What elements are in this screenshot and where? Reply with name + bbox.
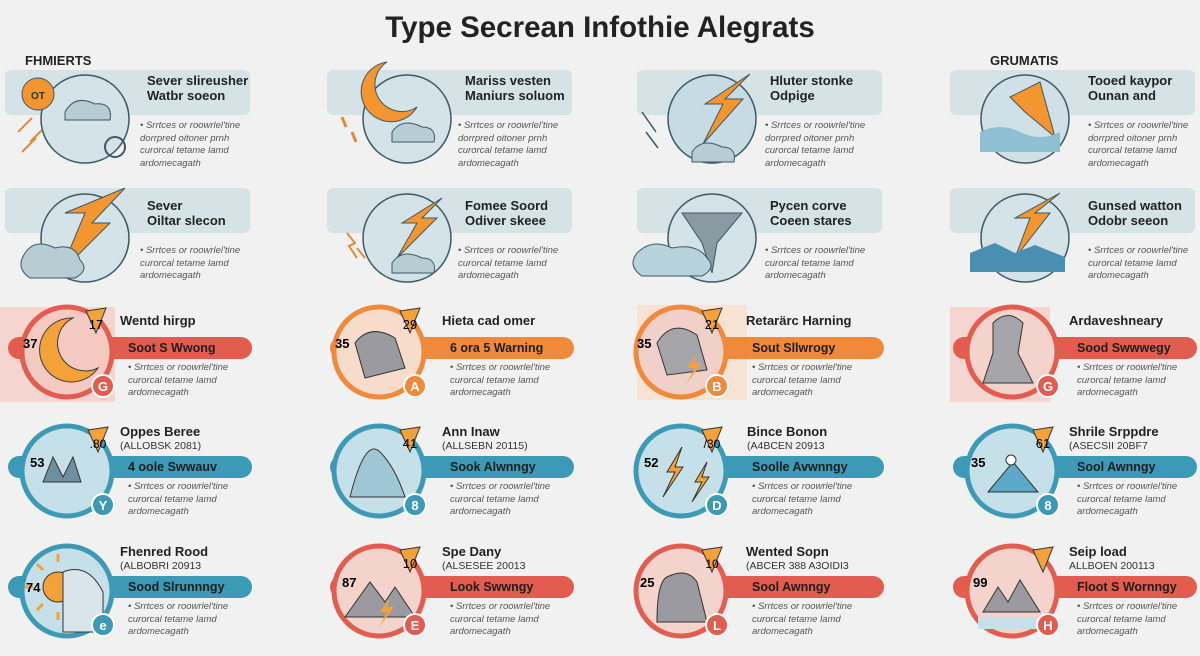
panel: row4 col4: Shrile Srppdre [1069, 424, 1159, 439]
panel: row5 col1 [8, 544, 252, 638]
panel: row5 col1: Sood Slrunnngy [128, 580, 225, 594]
icon: storm ring: 29 [403, 317, 417, 332]
panel: row5 col3: (ABCER 388 A3OIDI3 [746, 560, 849, 572]
icon: cloud ring: 21 [705, 317, 719, 332]
panel: row2 col3: • Srrtces or roowrlel'tine curorcal tetame lamd ardomecagath [765, 245, 865, 281]
icon: bolts ring: 52 [644, 455, 658, 470]
icon: bolts ring: /30 [704, 437, 721, 451]
icon: mountain bolt ring: E [411, 618, 420, 633]
icon: ice ring [20, 424, 115, 518]
panel: row1 col4: Ounan and [1088, 88, 1156, 103]
panel: row2 col2: • Srrtces or roowrlel'tine curorcal tetame lamd ardomecagath [458, 245, 558, 281]
panel: row4 col3: Bince Bonon [747, 424, 827, 439]
icon: mountain [980, 74, 1070, 164]
icon: ice ring: .80 [90, 437, 107, 451]
panel: row2 col4: Odobr seeon [1088, 213, 1168, 228]
icon: moon ring: 37 [23, 336, 37, 351]
panel: row5 col3: Sool Awnngy [752, 580, 830, 594]
panel: row3 col3: • Srrtces or roowrlel'tine curorcal tetame lamd ardomecagath [752, 362, 852, 398]
icon: moon ring: G [98, 379, 108, 394]
panel: row1 col1: • Srrtces or roowrlel'tine dorrpred oitoner prnh curorcal tetame lamd ardomecagath [140, 120, 240, 168]
panel: row4 col3 [634, 424, 884, 518]
panel: row5 col3: • Srrtces or roowrlel'tine curorcal tetame lamd ardomecagath [752, 601, 852, 637]
panel: row2 col2: Fomee Soord [465, 198, 548, 213]
panel: row3 col3: Retarärc Harning [746, 313, 851, 328]
panel: row2 col4: • Srrtces or roowrlel'tine curorcal tetame lamd ardomecagath [1088, 245, 1188, 281]
panel: row2 col1 [5, 188, 250, 283]
panel: row5 col4: ALLBOEN 200113 [1069, 560, 1155, 572]
icon: wave ring: 41 [403, 436, 417, 451]
panel: row1 col4: • Srrtces or roowrlel'tine dorrpred oitoner prnh curorcal tetame lamd ardomecagath [1088, 120, 1188, 168]
panel: row1 col2: Mariss vesten [465, 73, 551, 88]
icon: mountain ring: 61 [1036, 436, 1050, 451]
icon: moon ring: 17 [89, 317, 103, 332]
panel: row3 col1: Soot S Wwong [128, 341, 215, 355]
panel: row4 col2: Ann Inaw [442, 424, 500, 439]
panel: row5 col4: • Srrtces or roowrlel'tine curorcal tetame lamd ardomecagath [1077, 601, 1177, 637]
icon: moon ring [20, 304, 115, 400]
panel: row4 col1 [8, 424, 252, 518]
icon: volcano ring [965, 304, 1060, 400]
panel: row4 col3: Soolle Avwnngy [752, 460, 848, 474]
panel: row5 col4: Floot S Wornngy [1077, 580, 1177, 594]
panel: row4 col2: Sook Alwnngy [450, 460, 536, 474]
panel: row4 col1: Oppes Beree [120, 424, 200, 439]
panel: row5 col3 [634, 544, 884, 638]
icon: sun ring [20, 544, 115, 638]
icon: wave ring: 8 [411, 498, 419, 513]
panel: row1 col3 [637, 70, 882, 168]
panel: row4 col1: 4 oole Swwauv [128, 460, 217, 474]
panel: row4 col2 [330, 424, 574, 518]
panel: row5 col2: (ALSESEE 20013 [442, 560, 525, 572]
panel: row4 col3: • Srrtces or roowrlel'tine curorcal tetame lamd ardomecagath [752, 481, 852, 517]
panel: row3 col2: 6 ora 5 Warning [450, 341, 543, 355]
panel: row5 col2: Look Swwngy [450, 580, 533, 594]
panel: row3 col4: • Srrtces or roowrlel'tine curorcal tetame lamd ardomecagath [1077, 362, 1177, 398]
icon: volcano ring: G [1043, 379, 1053, 394]
panel: row3 col1: • Srrtces or roowrlel'tine curorcal tetame lamd ardomecagath [128, 362, 228, 398]
panel: row5 col1: (ALBOBRI 20913 [120, 560, 201, 572]
label: left: FHMIERTS [25, 53, 91, 68]
panel: row5 col3: Wented Sopn [746, 544, 829, 559]
panel: row2 col3 [632, 188, 882, 283]
panel: row4 col1: • Srrtces or roowrlel'tine curorcal tetame lamd ardomecagath [128, 481, 228, 517]
icon: mountain bolt ring [332, 544, 427, 638]
panel: row1 col3: • Srrtces or roowrlel'tine dorrpred oitoner prnh curorcal tetame lamd ardomecagath [765, 120, 865, 168]
panel: row3 col2: • Srrtces or roowrlel'tine curorcal tetame lamd ardomecagath [450, 362, 550, 398]
icon: peaks ring [965, 544, 1060, 638]
panel: row3 col3 [634, 304, 884, 400]
panel: row2 col3: Coeen stares [770, 213, 852, 228]
panel: row3 col4: Ardaveshneary [1069, 313, 1163, 328]
panel: row3 col4: Sood Swwwegy [1077, 341, 1171, 355]
panel: row3 col4 [950, 304, 1197, 402]
panel: row4 col4: Sool Awnngy [1077, 460, 1155, 474]
panel: row1 col2: Maniurs soluom [465, 88, 565, 103]
icon: ice ring: 53 [30, 455, 44, 470]
panel: row3 col1 [0, 304, 252, 402]
panel: row4 col3: (A4BCEN 20913 [747, 440, 825, 452]
panel: row1 col1: Sever slireusher [147, 73, 248, 88]
icon: sun ring: 74 [26, 580, 41, 595]
icon: storm [17, 74, 130, 164]
icon: bolt [346, 193, 452, 283]
icon: mountain ring: 8 [1044, 498, 1052, 513]
icon: mountain ring: 35 [971, 455, 985, 470]
panel: row2 col2 [327, 188, 572, 283]
icon: mountain bolt ring: 10 [403, 556, 417, 571]
icon: tornado [632, 193, 757, 283]
panel: row5 col4: Seip load [1069, 544, 1127, 559]
panel: row3 col3: Sout Sllwrogy [752, 341, 835, 355]
panel: row2 col4: Gunsed watton [1088, 198, 1182, 213]
panel: row4 col1: (ALLOBSK 2081) [120, 440, 201, 452]
panel: row1 col4: Tooed kaypor [1088, 73, 1172, 88]
panel: row5 col2: Spe Dany [442, 544, 501, 559]
panel: row4 col2: (ALLSEBN 20115) [442, 440, 528, 452]
icon: moon [340, 62, 452, 164]
icon: rock ring: 10 [705, 557, 719, 571]
icon: bolt sea [970, 192, 1070, 283]
icon: rock ring: L [713, 618, 721, 633]
icon: storm ring: 35 [335, 336, 349, 351]
icon: storm ring: A [410, 379, 420, 394]
panel: row1 col3: Odpige [770, 88, 815, 103]
panel: row2 col3: Pycen corve [770, 198, 847, 213]
icon: peaks ring: H [1043, 618, 1053, 633]
icon: wave ring [332, 424, 427, 518]
icon: bolts ring: D [712, 498, 722, 513]
panel: row1 col4 [950, 70, 1195, 168]
panel: row1 col2 [327, 62, 572, 168]
panel: row5 col1: Fhenred Rood [120, 544, 208, 559]
panel: row3 col2 [330, 304, 574, 400]
icon: cloud ring: 35 [637, 336, 651, 351]
panel: row2 col2: Odiver skeee [465, 213, 546, 228]
panel: row3 col1: Wentd hirgp [120, 313, 196, 328]
icon: sun ring: e [99, 618, 107, 633]
icon: bolts ring [634, 424, 729, 518]
panel: row2 col1: Oiltar slecon [147, 213, 226, 228]
label: right: GRUMATIS [990, 53, 1058, 68]
panel: row2 col1: Sever [147, 198, 182, 213]
icon: rock ring [634, 544, 729, 638]
panel: row3 col2: Hieta cad omer [442, 313, 535, 328]
icon: mountain bolt ring: 87 [342, 575, 356, 590]
panel: row4 col2: • Srrtces or roowrlel'tine curorcal tetame lamd ardomecagath [450, 481, 550, 517]
icon: ice ring: Y [99, 498, 108, 513]
icon: rock ring: 25 [640, 575, 654, 590]
panel: row2 col1: • Srrtces or roowrlel'tine curorcal tetame lamd ardomecagath [140, 245, 240, 281]
icon: peaks ring: 99 [973, 575, 987, 590]
panel: row1 col2: • Srrtces or roowrlel'tine dorrpred oitoner prnh curorcal tetame lamd ardomecagath [458, 120, 558, 168]
panel: row2 col4 [950, 188, 1195, 283]
panel: row4 col4: (ASECSII 20BF7 [1069, 440, 1148, 452]
panel: row1 col1: Watbr soeon [147, 88, 225, 103]
panel: row1 col3: Hluter stonke [770, 73, 853, 88]
icon: storm ring [332, 304, 427, 400]
icon: storm: OT [31, 91, 45, 102]
panel: row5 col1: • Srrtces or roowrlel'tine curorcal tetame lamd ardomecagath [128, 601, 228, 637]
icon: cloud ring: B [712, 379, 722, 394]
icon: mountain ring [965, 424, 1060, 518]
panel: row4 col4 [953, 424, 1197, 518]
panel: row5 col2 [330, 544, 574, 638]
title: Type Secrean Infothie Alegrats [385, 11, 815, 44]
panel: row1 col1 [5, 70, 250, 168]
icon: cloud ring [634, 304, 729, 400]
panel: row4 col4: • Srrtces or roowrlel'tine curorcal tetame lamd ardomecagath [1077, 481, 1177, 517]
icon: lightning [642, 74, 757, 164]
panel: row5 col2: • Srrtces or roowrlel'tine curorcal tetame lamd ardomecagath [450, 601, 550, 637]
icon: bolt cloud [20, 188, 130, 283]
panel: row5 col4 [953, 544, 1197, 638]
